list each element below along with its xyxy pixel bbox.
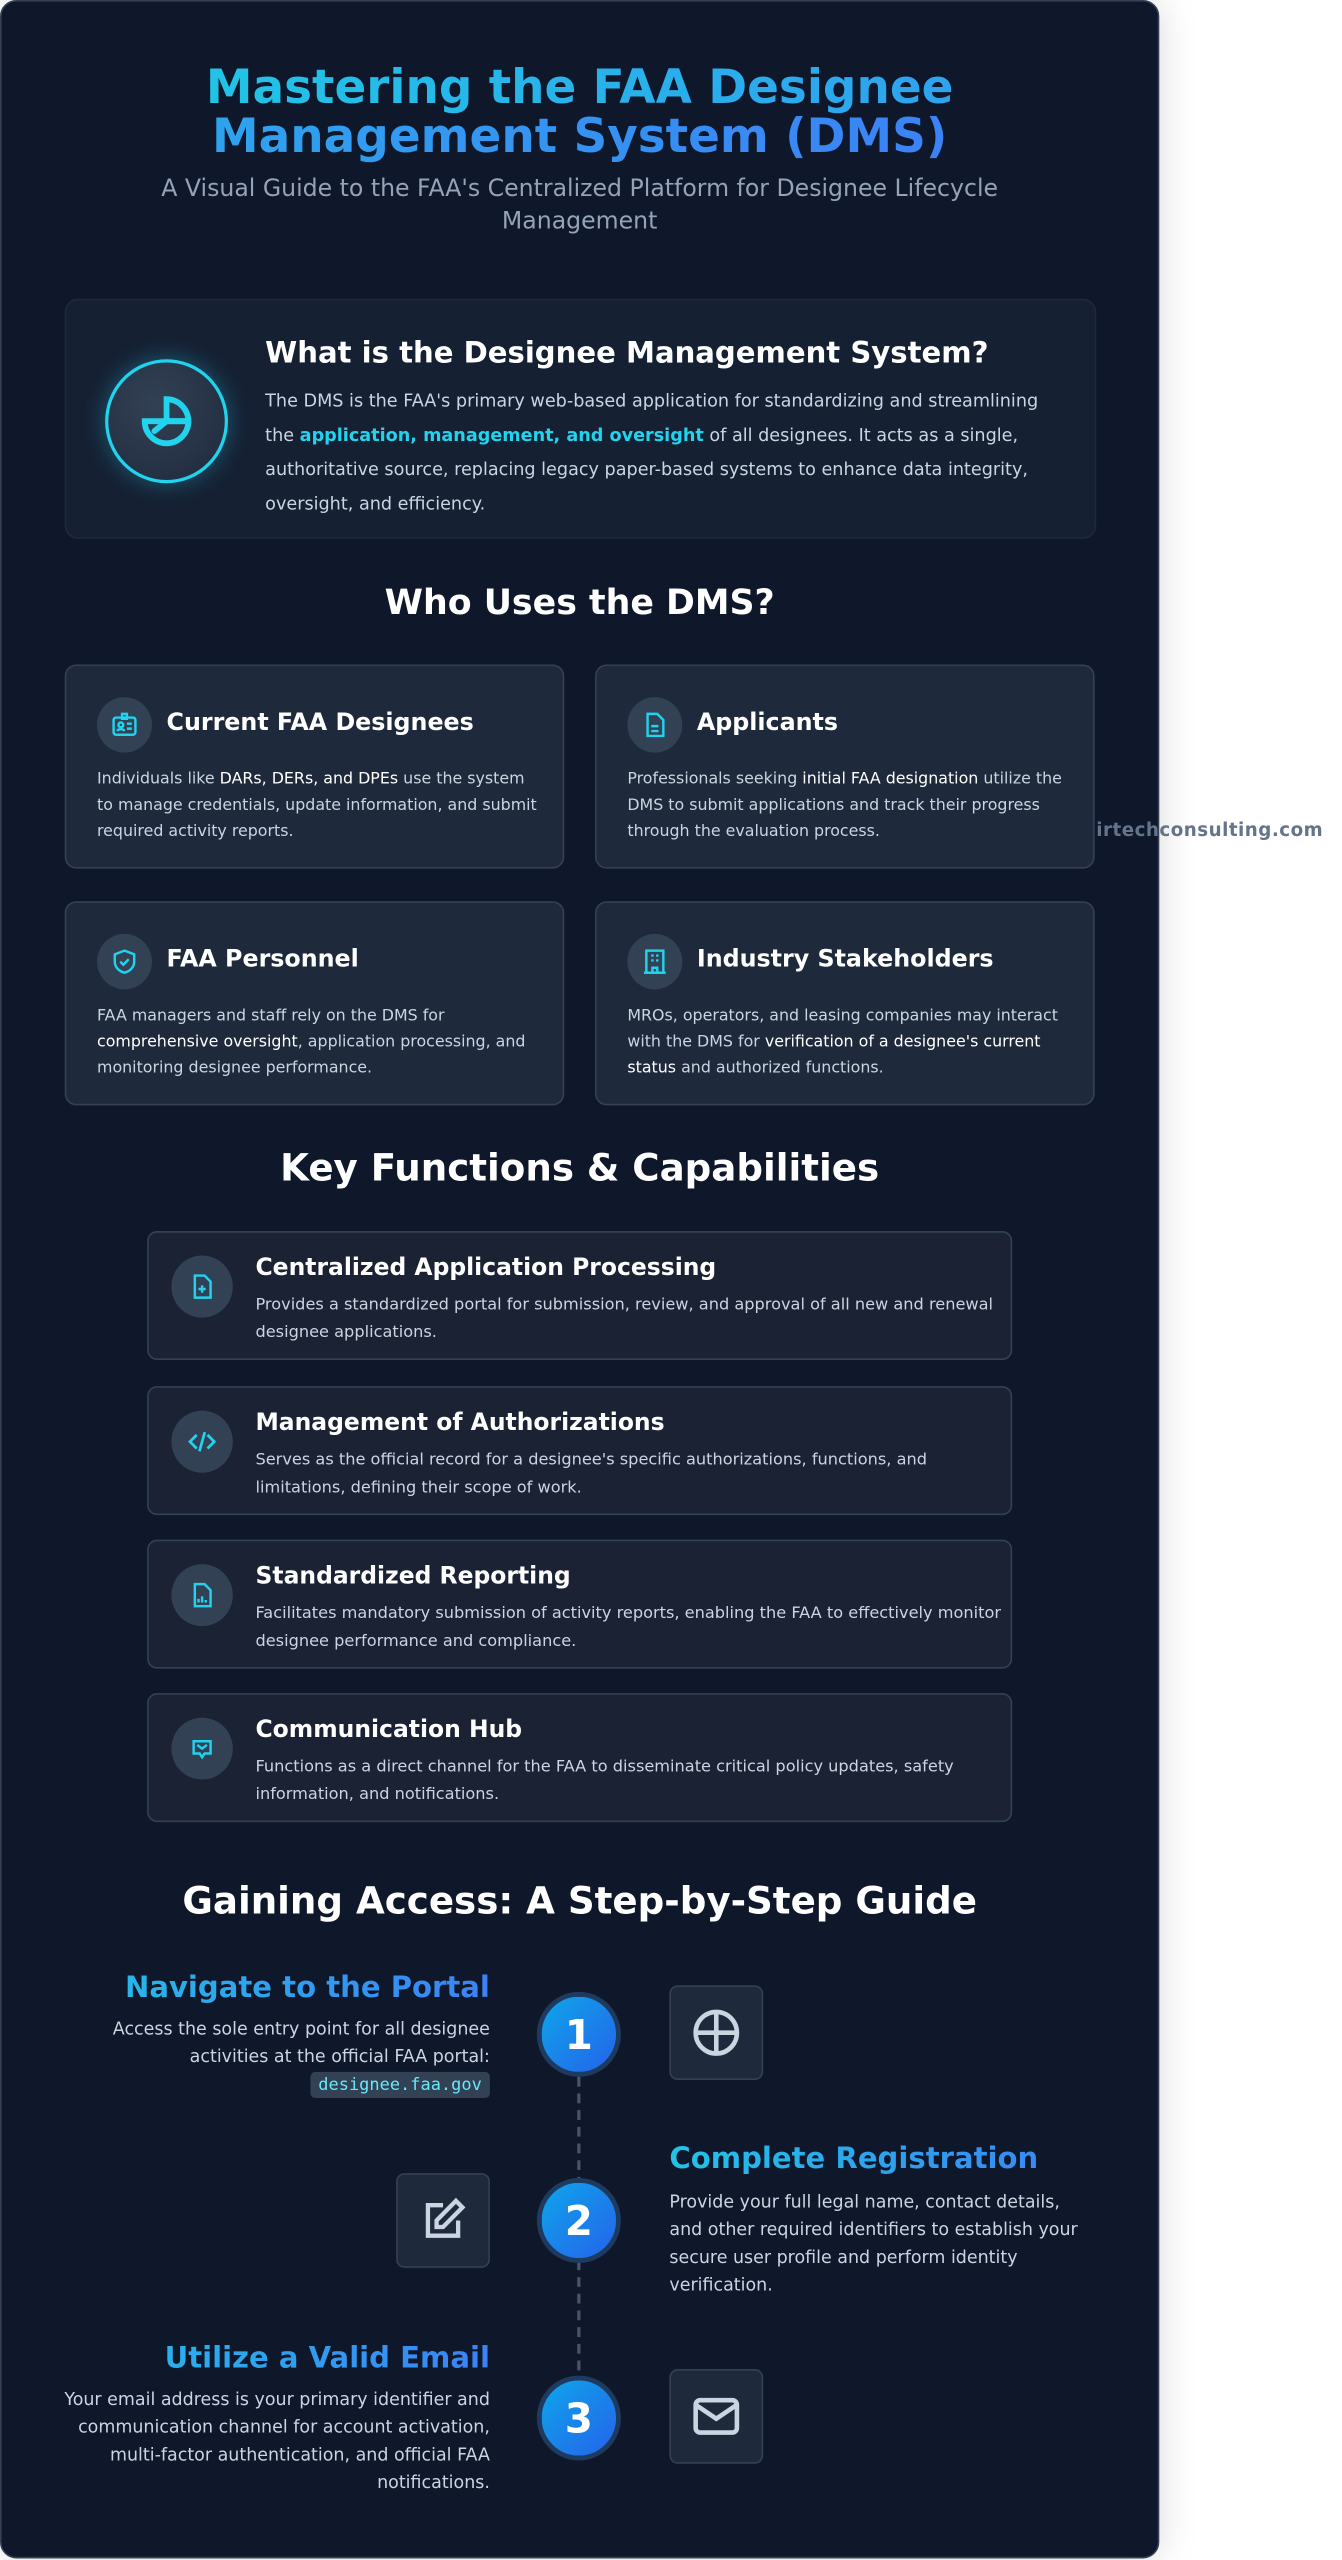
title [206, 59, 953, 163]
function: authorizations: Management of Authorizations [255, 1411, 665, 1437]
function: application processing: Provides a standardized portal for submission, review, and approval of all new and renewal designee applications. [255, 1296, 993, 1342]
icon: code [171, 1411, 233, 1473]
icon: id badge [97, 697, 152, 753]
heading: What is the Designee Management System? [265, 336, 988, 371]
step 3 text [64, 2341, 490, 2493]
step 2 circle [537, 2178, 621, 2263]
panel: current designees: Current FAA Designees [167, 709, 474, 736]
panel: current designees [65, 665, 564, 869]
icon: mail [669, 2369, 763, 2464]
heading: who uses: Who Uses the DMS? [385, 583, 775, 624]
subtitle: Management [502, 207, 657, 235]
step 2 icon: edit [396, 2173, 490, 2268]
step 1 text: designee.faa.gov [318, 2075, 482, 2095]
step 1 text: Access the sole entry point for all designee activities at the official FAA portal: [113, 2018, 490, 2067]
function: reporting [147, 1540, 1012, 1669]
panel: FAA personnel: FAA managers and staff rely on the DMS for comprehensive oversight, application processing, and monitoring designee performance. [97, 1007, 525, 1078]
step 1 text: Navigate to the Portal [125, 1971, 490, 2005]
watermark: irtechconsulting.com [1096, 820, 1323, 841]
body text: The DMS is the FAA's primary web-based application for standardizing and streamlining the application, management, and oversight of all designees. It acts as a single, authoritative source, replacing legacy paper-based systems to enhance data integrity, oversight, and efficiency. [265, 390, 1038, 514]
icon: pie chart [105, 359, 228, 483]
panel: industry stakeholders [595, 901, 1095, 1105]
icon: globe [669, 1985, 763, 2080]
step 3 text: Utilize a Valid Email [165, 2341, 490, 2376]
panel: FAA personnel: FAA Personnel [167, 945, 359, 973]
step 2 text: Provide your full legal name, contact details, and other required identifiers to establish your secure user profile and perform identity verification. [669, 2191, 1078, 2296]
function: communication: Functions as a direct channel for the FAA to disseminate critical policy updates, safety information, and notifications. [255, 1758, 954, 1804]
panel: applicants: Applicants [697, 709, 838, 736]
icon: message [171, 1718, 233, 1780]
dashed connector [577, 2077, 580, 2387]
function: reporting: Facilitates mandatory submission of activity reports, enabling the FAA to effectively monitor designee performance and compliance. [255, 1605, 1001, 1651]
panel: current designees: Individuals like DARs, DERs, and DPEs use the system to manage credentials, update information, and submit required activity reports. [97, 771, 537, 841]
title: Management System (DMS) [212, 108, 947, 163]
function: application processing: Centralized Application Processing [255, 1256, 716, 1282]
icon: document [627, 697, 682, 753]
step 1 text [112, 1971, 490, 2098]
icon: report file [171, 1564, 233, 1626]
function: application processing [147, 1231, 1012, 1360]
heading: key functions: Key Functions & Capabilities [280, 1148, 879, 1190]
panel: FAA personnel [65, 901, 564, 1105]
step 1 circle [537, 1992, 621, 2077]
step 2 text: Complete Registration [669, 2142, 1038, 2176]
subtitle [161, 175, 998, 235]
panel: applicants [595, 665, 1095, 869]
subtitle: A Visual Guide to the FAA's Centralized Platform for Designee Lifecycle [161, 175, 998, 202]
icon: building [627, 934, 682, 989]
function: reporting: Standardized Reporting [255, 1564, 571, 1590]
function: authorizations [147, 1386, 1012, 1515]
function: communication: Communication Hub [255, 1718, 522, 1744]
step 2 text [669, 2142, 1078, 2296]
panel: industry stakeholders: MROs, operators, and leasing companies may interact with the DMS for verification of a designee's current status and authorized functions. [627, 1007, 1058, 1078]
step 1 circle: 1 [565, 2011, 593, 2058]
icon: file plus [171, 1256, 233, 1318]
function: communication [147, 1693, 1012, 1822]
heading: gaining access: Gaining Access: A Step-by-Step Guide [182, 1881, 977, 1923]
step 2 circle: 2 [565, 2197, 593, 2244]
panel: industry stakeholders: Industry Stakeholders [697, 945, 994, 973]
function: authorizations: Serves as the official record for a designee's specific authorizations, functions, and limitations, defining their scope of work. [255, 1451, 927, 1497]
step 3 circle: 3 [565, 2394, 593, 2442]
panel: what is DMS [65, 299, 1096, 539]
title: Mastering the FAA Designee [206, 59, 953, 114]
step 3 circle [537, 2376, 621, 2460]
icon: shield [97, 934, 152, 989]
panel: applicants: Professionals seeking initial FAA designation utilize the DMS to submit applications and track their progress through the evaluation process. [627, 771, 1062, 841]
step 3 text: Your email address is your primary identifier and communication channel for account activation, multi-factor authentication, and official FAA notifications. [64, 2389, 490, 2493]
